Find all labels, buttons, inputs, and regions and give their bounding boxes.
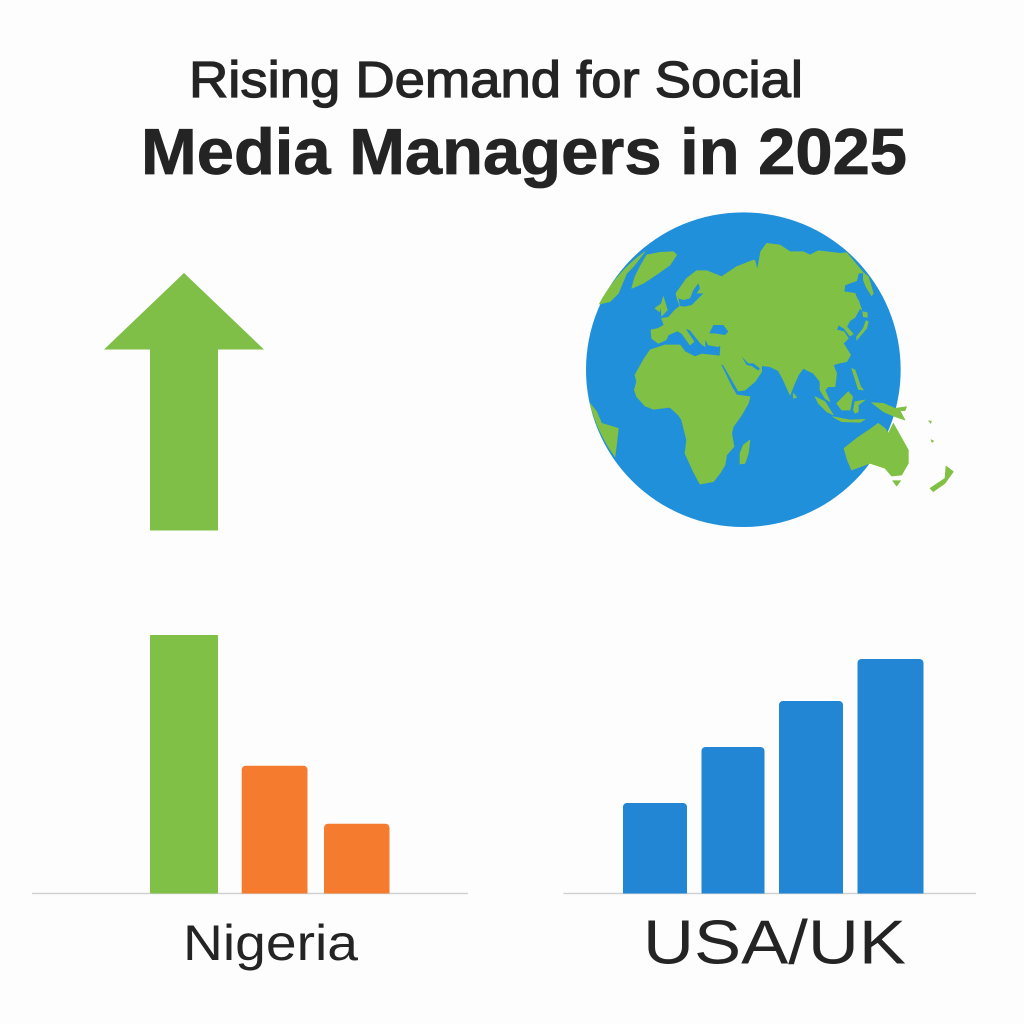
Sri Lanka xyxy=(793,393,797,398)
Borneo xyxy=(837,392,853,410)
title xyxy=(141,51,907,188)
icon: green up arrow xyxy=(104,273,264,530)
blue bar 3 xyxy=(779,701,843,894)
bar chart: Nigeria xyxy=(32,635,468,971)
South America xyxy=(590,403,618,457)
title line 1: Rising Demand for Social xyxy=(189,51,803,108)
small islands xyxy=(929,421,934,442)
Black Sea xyxy=(709,325,728,335)
Greenland xyxy=(632,252,677,288)
orange bar 1 xyxy=(242,766,308,894)
Kamchatka xyxy=(863,273,873,296)
Philippines xyxy=(852,368,863,390)
title line 2: Media Managers in 2025 xyxy=(141,115,907,188)
green bar xyxy=(150,635,218,894)
Persian Gulf xyxy=(742,357,760,371)
blue bar 2 xyxy=(702,747,764,894)
land masses xyxy=(590,243,953,492)
Java xyxy=(833,417,865,422)
inland seas xyxy=(678,283,760,371)
Japan xyxy=(857,321,868,340)
Australia xyxy=(844,423,908,476)
icon: globe xyxy=(586,212,953,527)
Ireland xyxy=(655,304,661,312)
Eurasia xyxy=(651,243,863,402)
Hokkaido xyxy=(863,312,867,317)
Britain xyxy=(661,297,667,316)
Sumatra xyxy=(815,397,833,415)
Tasmania xyxy=(893,481,901,486)
orange bar 2 xyxy=(324,824,390,894)
ocean xyxy=(586,212,901,527)
Sakhalin xyxy=(857,298,862,310)
Sulawesi xyxy=(853,400,865,413)
Africa xyxy=(634,345,750,484)
baseline xyxy=(32,893,468,894)
North America xyxy=(599,252,645,304)
Madagascar xyxy=(740,440,750,464)
blue bar 1 xyxy=(623,803,687,894)
New Guinea xyxy=(872,403,907,420)
label: USA/UK: USA/UK xyxy=(643,908,906,978)
New Zealand xyxy=(930,466,953,492)
label: Nigeria: Nigeria xyxy=(183,915,358,971)
baseline xyxy=(564,893,976,894)
Baltic Sea xyxy=(678,283,703,307)
blue bar 4 xyxy=(858,659,924,894)
bar chart: USA/UK xyxy=(564,659,976,978)
